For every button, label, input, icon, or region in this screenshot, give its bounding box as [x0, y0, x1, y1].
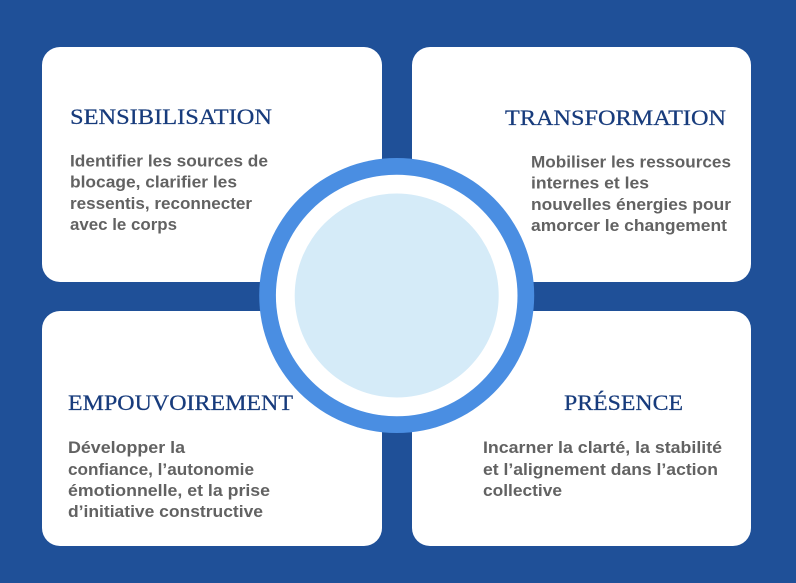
panel card: transformation — [412, 47, 751, 282]
heading: présence: PRÉSENCE — [564, 390, 683, 415]
panel: transformation — [412, 47, 751, 282]
central circle — [259, 158, 534, 433]
text block: empouvoirement — [68, 438, 270, 521]
text block: présence: et l’alignement dans l’action — [483, 460, 718, 479]
text block: sensibilisation: avec le corps — [70, 215, 177, 234]
text block: transformation: nouvelles énergies pour — [531, 195, 731, 214]
panel: empouvoirement — [42, 311, 382, 546]
panel card: empouvoirement — [42, 311, 382, 546]
text block: transformation — [531, 152, 731, 235]
panel: sensibilisation — [42, 47, 382, 282]
text block: présence: collective — [483, 481, 562, 500]
text block: sensibilisation: ressentis, reconnecter — [70, 194, 252, 213]
text block: empouvoirement: confiance, l’autonomie — [68, 460, 254, 479]
text block: présence: Incarner la clarté, la stabilité — [483, 438, 722, 457]
panel card: présence — [412, 311, 751, 546]
text block: empouvoirement: Développer la — [68, 438, 186, 457]
panel card: sensibilisation — [42, 47, 382, 282]
text block: transformation: internes et les — [531, 174, 649, 192]
text block: empouvoirement: émotionnelle, et la prise — [68, 481, 270, 500]
text block: transformation: Mobiliser les ressources — [531, 152, 731, 172]
panel: présence — [412, 311, 751, 546]
heading: transformation: TRANSFORMATION — [505, 105, 726, 130]
text block: sensibilisation: blocage, clarifier les — [70, 172, 237, 192]
text block: empouvoirement: d’initiative constructive — [68, 502, 263, 521]
text block: sensibilisation: Identifier les sources de — [70, 152, 268, 170]
heading: empouvoirement: EMPOUVOIREMENT — [68, 390, 293, 415]
heading: sensibilisation: SENSIBILISATION — [70, 104, 272, 129]
text block: sensibilisation — [70, 152, 268, 234]
text block: transformation: amorcer le changement — [531, 216, 727, 235]
text block: présence — [483, 438, 722, 500]
